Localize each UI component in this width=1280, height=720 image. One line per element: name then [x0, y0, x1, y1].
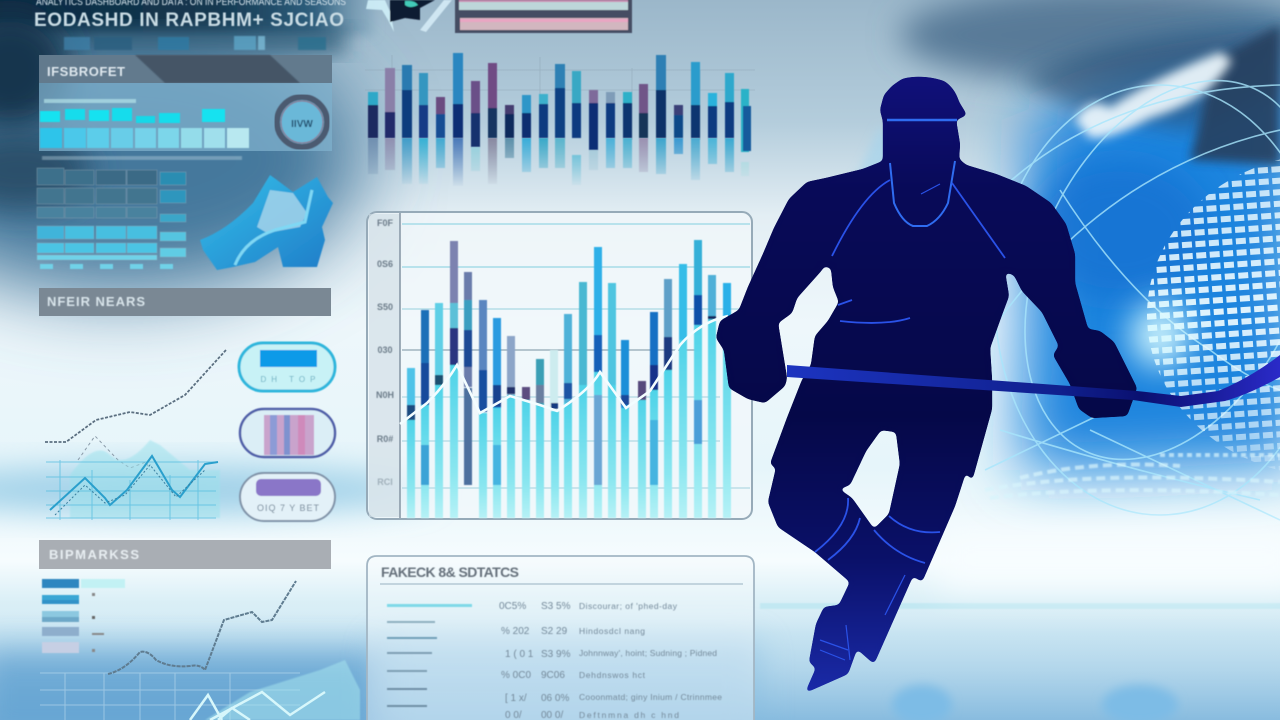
- y axis labels: S50: [377, 302, 393, 312]
- trend line: [108, 581, 296, 674]
- legend box: [455, 0, 632, 33]
- table rows: Cooonmatd; giny Inium / Ctrinnmee: [579, 692, 722, 702]
- table rows: [387, 601, 722, 720]
- hockey player silhouette: [716, 77, 1280, 693]
- top title band: [34, 0, 346, 50]
- panel: trend lines: [39, 288, 335, 521]
- dashboard title: [34, 0, 346, 31]
- under-line light bars: [407, 318, 731, 518]
- panel header: [39, 540, 331, 569]
- globe and data sphere: [940, 25, 1280, 590]
- panel: key metrics: [37, 55, 333, 270]
- table rows: 1 ( 0 1: [505, 649, 534, 660]
- small hockey emblem: [366, 0, 452, 32]
- cyan area chart: [190, 660, 360, 720]
- table rows: Dehdnswos hct: [579, 670, 646, 680]
- panel: business: [39, 540, 360, 720]
- table rows: 06 0%: [541, 693, 569, 704]
- y axis labels: R0#: [377, 434, 393, 444]
- globe wireframe: [968, 34, 1280, 520]
- player body: [716, 77, 1137, 693]
- panel header: [39, 288, 331, 316]
- axis band: [369, 214, 400, 517]
- table rows: [ 1 x/: [505, 693, 527, 704]
- y axis labels: 030: [377, 345, 393, 355]
- frost band: [985, 455, 1280, 498]
- table rows: 0C5%: [499, 601, 526, 612]
- y axis labels: RCI: [377, 477, 393, 487]
- heat matrix: [37, 168, 186, 269]
- caption line: [42, 156, 242, 160]
- pill: blue gauge: DH TOP: [260, 375, 316, 384]
- ring gauge: [277, 97, 327, 147]
- table title: FAKECK 8& SDTATCS: [381, 564, 519, 580]
- dot grid: [1147, 153, 1280, 477]
- table rows: % 202: [501, 626, 530, 637]
- top bar chart: [365, 53, 755, 186]
- panel header: IFSBROFET: [47, 64, 125, 79]
- table rows: Discourar; of 'phed-day: [579, 601, 678, 611]
- grid floor: [40, 673, 300, 720]
- main chart panel: [367, 212, 752, 519]
- table rows: % 0C0: [501, 670, 531, 681]
- table rows: S3 5%: [541, 601, 571, 612]
- pill: blue gauge: [239, 343, 335, 391]
- pill: purple tile: OIQ 7 Y BET: [257, 503, 320, 513]
- panel: factors and statistics table: [367, 556, 754, 720]
- y axis labels: N0H: [376, 390, 394, 400]
- bar reflections: [368, 138, 749, 186]
- cyan bar row: [40, 99, 249, 148]
- table rows: Deftnmna dh c hnd: [579, 710, 679, 720]
- table rows: S3 9%: [541, 649, 571, 660]
- panel header: [39, 55, 332, 83]
- panel header: BIPMARKSS: [49, 547, 139, 562]
- jersey and gear highlights: [815, 120, 1005, 660]
- table rows: Johnnway', hoint; Sudning ; Pidned: [579, 648, 717, 658]
- panel header: NFEIR NEARS: [47, 294, 145, 309]
- table rows: 9C06: [541, 670, 565, 681]
- trend line: [400, 316, 728, 424]
- gridlines: [402, 224, 750, 488]
- cloud highlight: [1075, 52, 1232, 138]
- dashboard title: EODASHD IN RAPBHM+ SJCIAO: [34, 10, 344, 31]
- y axis labels: F0F: [377, 218, 393, 228]
- icon: skate shape: [200, 175, 333, 270]
- bars: [407, 240, 731, 518]
- line chart: [45, 350, 226, 520]
- table rows: Hindosdcl nang: [579, 626, 645, 636]
- y axis labels: [376, 218, 394, 487]
- title strip blocks: [64, 36, 326, 50]
- y axis labels: 0S6: [377, 259, 393, 269]
- stick: [787, 355, 1280, 407]
- pill: striped bars: [240, 409, 335, 457]
- panel body: [39, 83, 332, 151]
- ring gauge: IIVW: [291, 119, 313, 130]
- legend list: [42, 579, 125, 653]
- table rows: S2 29: [541, 626, 568, 637]
- pill: purple tile: [240, 473, 335, 521]
